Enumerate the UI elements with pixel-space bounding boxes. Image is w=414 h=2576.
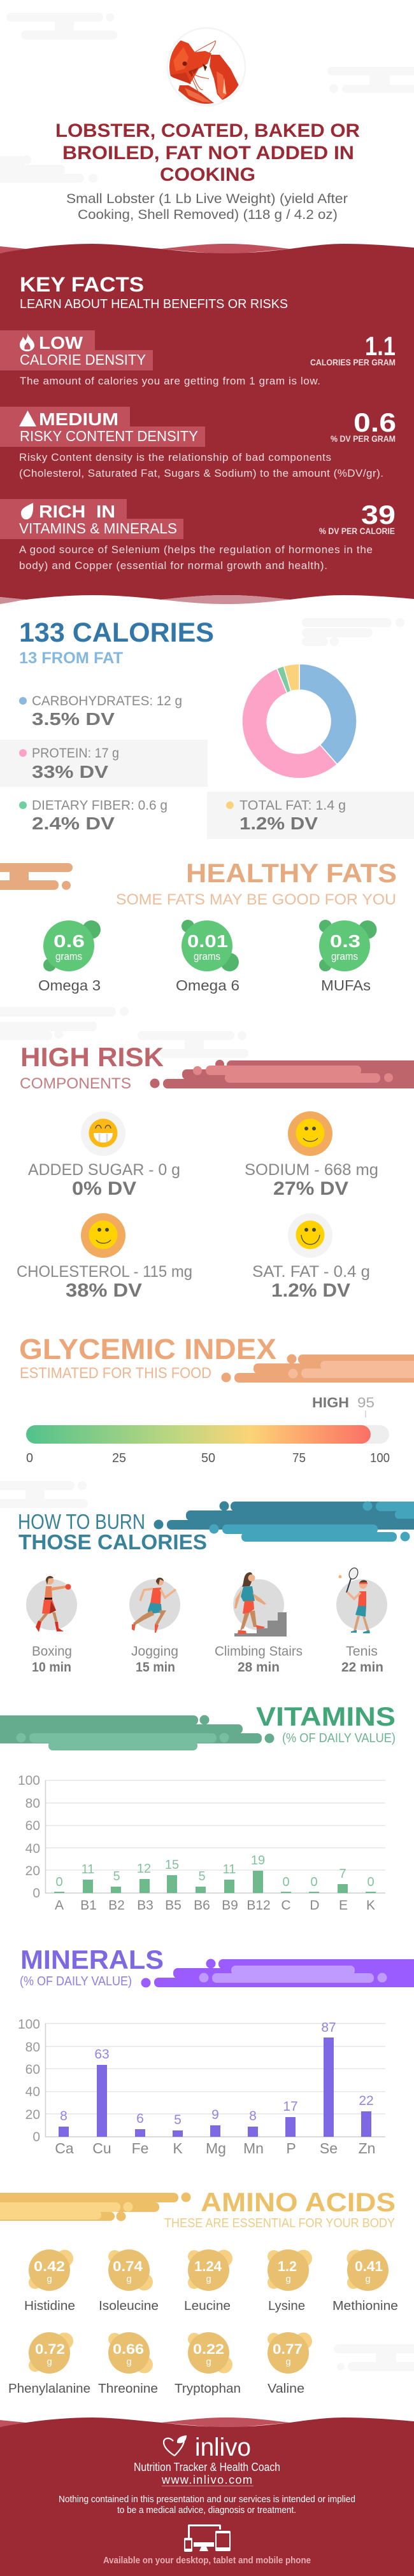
subheading: components: COMPONENTS [20,1075,131,1092]
chart: minerals bar chart: 17 [283,2099,298,2114]
chart: vitamins bar chart: 80 [25,1796,40,1811]
item: protein: 33% DV [32,762,108,782]
badge: tryptophan: Tryptophan [175,2382,241,2396]
logo: inlivo: inlivo [195,2433,251,2461]
activity: tennis [336,1566,387,1675]
item: added sugar [28,1111,180,1199]
heading: key facts: LEARN ABOUT HEALTH BENEFITS OR RISKS [20,297,288,311]
chart: vitamins bar chart: 5 [113,1869,120,1883]
stat: 39 % dv per calorie: % DV PER CALORIE [319,526,395,536]
label: risky content density: RISKY CONTENT DENSITY [20,428,198,444]
label: vitamins and minerals: VITAMINS & MINERALS [19,520,177,537]
chart: minerals bar chart: P [286,2140,296,2157]
chart: vitamins bar chart: D [310,1898,320,1913]
chart: minerals bar chart: 8 [60,2109,68,2123]
badge: omega 3 [38,920,101,994]
badge: leucine: g [206,2274,211,2284]
badge: phenylalanine: Phenylalanine [8,2382,90,2396]
stat: 1.1 calories per gram: CALORIES PER GRAM [310,357,396,367]
heading: amino acids: AMINO ACIDS [201,2187,396,2217]
decoration: cloud bars [222,1355,414,1383]
chart: minerals bar chart: 0 [32,2130,40,2144]
subheading: 13 from fat: 13 FROM FAT [19,649,123,667]
chart: vitamins bar chart: 0 [282,1875,290,1889]
subheading: ESTIMATED FOR THIS FOOD [20,1365,211,1382]
stat: 39 % dv per calorie: 39 [361,500,396,530]
activity: boxing: 10 min [32,1660,71,1675]
description: Risky Content density is the relationship of bad components [19,451,331,463]
badge: histidine: 0.42 [34,2258,65,2274]
badge: methionine: Methionine [332,2299,398,2313]
activity: climbing stairs: Climbing Stairs [215,1644,303,1659]
panel: footer [0,2418,414,2576]
badge: valine: Valine [268,2382,304,2396]
fact: rich in vitamins and minerals [0,499,396,572]
subheading: (% OF DAILY VALUE) [282,1731,396,1745]
badge: omega 6: Omega 6 [176,977,239,994]
label: medium: MEDIUM [39,409,118,429]
chart: minerals bar chart: 40 [25,2085,40,2099]
item: cholesterol: CHOLESTEROL - 115 mg [17,1263,192,1281]
subheading: THESE ARE ESSENTIAL FOR YOUR BODY [164,2216,395,2230]
item: added sugar: 0% DV [72,1178,136,1199]
activity: climbing stairs [215,1572,303,1675]
icon: tennis player [339,1566,370,1633]
badge: leucine [184,2249,232,2313]
badge: phenylalanine [8,2332,90,2396]
item: total fat: TOTAL FAT: 1.4 g [239,798,346,813]
icon: flame [20,333,34,351]
item: dietary fiber [19,798,168,833]
badge: histidine: g [46,2274,52,2284]
badge: leucine: 1.24 [194,2258,222,2274]
badge: omega 3: 0.6 [54,931,85,951]
badge: threonine: g [126,2356,132,2367]
chart: vitamins bar chart: B12 [246,1898,271,1913]
item: saturated fat [252,1213,370,1301]
badge: isoleucine: g [126,2274,132,2284]
description: body) and Copper (essential for normal growth and health). [19,560,327,572]
item: total fat [226,798,346,833]
chart: vitamins bar chart: 11 [82,1862,94,1876]
icon: warning triangle [19,411,36,426]
fact: medium risky content density [0,407,396,479]
heading: glycemic index: GLYCEMIC INDEX [19,1333,276,1365]
label: low: LOW [39,333,83,353]
chart: vitamins bar chart: 5 [198,1869,206,1883]
badge: omega 6: 0.01 [187,931,228,951]
chart: minerals bar chart: Fe [132,2140,148,2157]
chart: vitamins bar chart: B6 [194,1898,210,1913]
title: LOBSTER, COATED, BAKED OR [55,120,360,141]
chart: vitamins bar chart: 11 [223,1862,236,1876]
badge: phenylalanine: 0.72 [35,2341,65,2357]
heading: healthy fats: HEALTHY FATS [186,858,397,888]
icon: boxer [36,1576,71,1632]
item: carbohydrates: CARBOHYDRATES: 12 g [32,694,182,708]
disclaimer: to be a medical advice, diagnosis or treatment. [117,2505,296,2516]
availability note: Available on your desktop, tablet and mobile phone [103,2555,311,2566]
description: (Cholesterol, Saturated Fat, Sugars & Sodium) to the amount (%DV/gr). [19,467,383,479]
item: added sugar: ADDED SUGAR - 0 g [28,1161,180,1179]
item: dietary fiber: 2.4% DV [32,813,115,833]
badge: omega 6 [176,920,239,994]
disclaimer: Nothing contained in this presentation and our services is intended or implied [59,2494,355,2505]
activity: tennis: 22 min [341,1660,383,1675]
chart: vitamins bar chart: C [281,1898,291,1913]
website link: www.inlivo.com [161,2474,252,2486]
disclaimer [59,2494,355,2516]
badge: tryptophan [175,2332,241,2396]
badge: omega 6: grams [194,950,220,962]
value marker: high 95: 95 [357,1395,375,1411]
description: The amount of calories you are getting from 1 gram is low. [20,375,320,387]
chart: vitamins bar chart: B1 [80,1898,97,1913]
value marker: high 95 [312,1395,375,1418]
activity: boxing: Boxing [32,1644,72,1659]
panel: healthy fats [0,858,397,994]
panel: calories [0,617,414,839]
chart: minerals bar chart: Cu [92,2140,111,2157]
chart: minerals bar chart: 9 [211,2108,219,2122]
item: cholesterol: 38% DV [66,1280,142,1301]
badge: lysine: g [285,2274,291,2284]
chart: vitamins bar chart: B5 [165,1898,182,1913]
heading: vitamins: VITAMINS [256,1701,396,1731]
badge: isoleucine [99,2249,159,2313]
heading [18,1510,207,1554]
title: COOKING [160,164,255,185]
chart: minerals bar chart: Ca [55,2140,74,2157]
badge: histidine [24,2249,75,2313]
chart: minerals bar chart: 20 [25,2108,40,2122]
chart: minerals bar chart: Zn [359,2140,375,2157]
item: sodium [245,1111,378,1199]
heading: minerals: MINERALS [20,1945,164,1974]
stat: 0.6 % dv per gram [331,407,396,444]
panel: glycemic index [19,1333,414,1465]
chart: minerals bar chart: 6 [136,2111,144,2126]
chart: minerals bar chart: Mn [243,2140,264,2157]
chart: vitamins bar chart: 0 [55,1875,63,1889]
heading: key facts [20,273,288,311]
heading: HOW TO BURN [18,1510,145,1533]
item: carbohydrates: 3.5% DV [32,709,115,729]
badge: mufas: 0.3 [330,931,360,951]
badge: mufas [319,920,377,994]
chart: minerals bar chart: 8 [249,2109,257,2123]
item: cholesterol [17,1213,192,1301]
heading: high risk: HIGH RISK [20,1042,164,1072]
title: BROILED, FAT NOT ADDED IN [62,143,354,164]
fact: low calorie density [0,330,396,387]
subtitle: serving size: Cooking, Shell Removed) (118 g / 4.2 oz) [78,208,338,222]
badge: omega 3: Omega 3 [38,977,101,994]
gauge scale: 25 [112,1451,126,1465]
description [19,544,373,572]
badge: valine [268,2332,312,2396]
heading: THOSE CALORIES [18,1530,207,1554]
badge: phenylalanine: g [46,2356,52,2367]
panel: how to burn those calories [18,1501,414,1675]
gauge scale: 50 [201,1451,215,1465]
badge: omega 3: grams [55,950,82,962]
chart: vitamins bar chart: K [366,1898,375,1913]
chart: vitamins bar chart: E [339,1898,348,1913]
badge: mufas: MUFAs [321,977,371,994]
icon: leaf [21,503,33,519]
activity: tennis: Tenis [346,1644,378,1659]
badge: leucine: Leucine [184,2299,231,2313]
activity: jogging: 15 min [136,1660,175,1675]
panel: vitamins [0,1701,396,1913]
label: calorie density: CALORIE DENSITY [20,351,146,368]
panel: key facts [0,244,414,604]
logo: inlivo [164,2433,251,2461]
item: protein: PROTEIN: 17 g [32,746,119,761]
badge: lysine: 1.2 [278,2258,297,2274]
subheading: (% OF DAILY VALUE) [20,1974,132,1988]
stat: 39 % dv per calorie [319,500,396,536]
item: saturated fat: SAT. FAT - 0.4 g [252,1263,370,1281]
chart: minerals bar chart: 80 [25,2040,40,2055]
stat: 0.6 % dv per gram: 0.6 [353,407,396,437]
chart: vitamins bar chart: 15 [165,1858,179,1872]
activity: boxing [26,1576,77,1675]
item: dietary fiber: DIETARY FIBER: 0.6 g [32,798,168,813]
badge: tryptophan: 0.22 [193,2341,224,2357]
icon: jogger [132,1577,176,1633]
badge: threonine [98,2332,158,2396]
decoration: cloud bars [0,1715,274,1750]
badge: methionine: g [365,2274,371,2284]
heading: key facts: KEY FACTS [20,273,144,296]
panel: minerals [18,1945,414,2157]
gauge scale: 100 [370,1451,390,1465]
chart: glycemic gauge [26,1425,389,1444]
activity: jogging [129,1577,180,1675]
chart: minerals bar chart: K [173,2140,183,2157]
badge: valine: g [285,2356,291,2367]
gauge scale: 75 [292,1451,306,1465]
decoration: cloud bars [154,1501,414,1542]
chart: vitamins bar chart: A [55,1898,64,1913]
chart: macronutrient donut [242,664,357,778]
chart: minerals bar chart: 5 [174,2113,182,2127]
chart: minerals bar chart: 87 [321,2020,336,2035]
chart: vitamins bar chart: B9 [222,1898,238,1913]
icon: lobster photo [168,28,245,106]
chart: minerals bar chart [18,2017,385,2157]
value marker: high 95: HIGH [312,1395,349,1411]
chart: vitamins bar chart [18,1773,385,1913]
panel: high risk components [17,1042,414,1301]
tagline: Nutrition Tracker & Health Coach [134,2461,280,2474]
activity: climbing stairs: 28 min [238,1660,280,1675]
gauge scale: 0 [26,1451,33,1465]
decoration: cloud bars [0,2192,191,2221]
stat: 0.6 % dv per gram: % DV PER GRAM [331,433,396,444]
chart: vitamins bar chart: 7 [339,1867,346,1881]
badge: isoleucine: 0.74 [113,2258,143,2274]
badge: valine: 0.77 [273,2341,303,2357]
chart: vitamins bar chart: 0 [32,1886,40,1901]
chart: minerals bar chart: Se [320,2140,338,2157]
item: sodium: SODIUM - 668 mg [245,1161,378,1179]
badge: tryptophan: g [206,2356,211,2367]
item: protein [19,746,119,782]
gauge scale [26,1451,390,1465]
chart: vitamins bar chart: 60 [25,1819,40,1833]
chart: minerals bar chart: 63 [94,2047,110,2062]
icon: devices [184,2524,231,2552]
decoration: cloud bars [141,1959,414,1987]
badge: lysine [268,2249,312,2313]
activity: jogging: Jogging [131,1644,178,1659]
decoration: cloud bars [150,1060,414,1088]
badge: threonine: Threonine [98,2382,158,2396]
subtitle: serving size: Small Lobster (1 Lb Live Weight) (yield After [66,192,348,206]
heading: 133 calories: 133 CALORIES [19,617,214,648]
badge: histidine: Histidine [24,2299,75,2313]
chart: vitamins bar chart: 12 [137,1862,151,1876]
chart: vitamins bar chart: 0 [310,1875,318,1889]
chart: vitamins bar chart: 0 [367,1875,375,1889]
chart: minerals bar chart: 22 [359,2094,374,2108]
chart: vitamins bar chart: 20 [25,1864,40,1878]
chart: vitamins bar chart: 100 [18,1773,40,1788]
badge: isoleucine: Isoleucine [99,2299,159,2313]
chart: vitamins bar chart: 40 [25,1841,40,1856]
subtitle: serving size [66,192,348,222]
chart: vitamins bar chart: 19 [251,1854,265,1868]
item: carbohydrates [19,694,182,729]
badge: methionine [332,2249,398,2313]
badge: threonine: 0.66 [113,2341,144,2357]
decoration: cloud bars [0,863,73,890]
panel: amino acids [0,2187,398,2396]
item: sodium: 27% DV [273,1178,348,1199]
chart: minerals bar chart: Mg [206,2140,226,2157]
item: saturated fat: 1.2% DV [271,1280,350,1301]
chart: vitamins bar chart: B2 [108,1898,125,1913]
badge: mufas: grams [331,950,358,962]
icon: stair climber [234,1572,287,1636]
chart: minerals bar chart: 100 [18,2017,40,2032]
stat: 1.1 calories per gram: 1.1 [365,331,396,361]
item: total fat: 1.2% DV [239,813,318,833]
badge: lysine: Lysine [268,2299,305,2313]
badge: methionine: 0.41 [355,2258,383,2274]
description [19,451,383,479]
chart: vitamins bar chart: B3 [137,1898,153,1913]
title [55,120,360,185]
stat: 1.1 calories per gram [310,331,396,367]
chart: minerals bar chart: 60 [25,2062,40,2077]
description: A good source of Selenium (helps the regulation of hormones in the [19,544,373,556]
subheading: SOME FATS MAY BE GOOD FOR YOU [116,891,396,908]
label: rich in: RICH IN [39,502,115,521]
